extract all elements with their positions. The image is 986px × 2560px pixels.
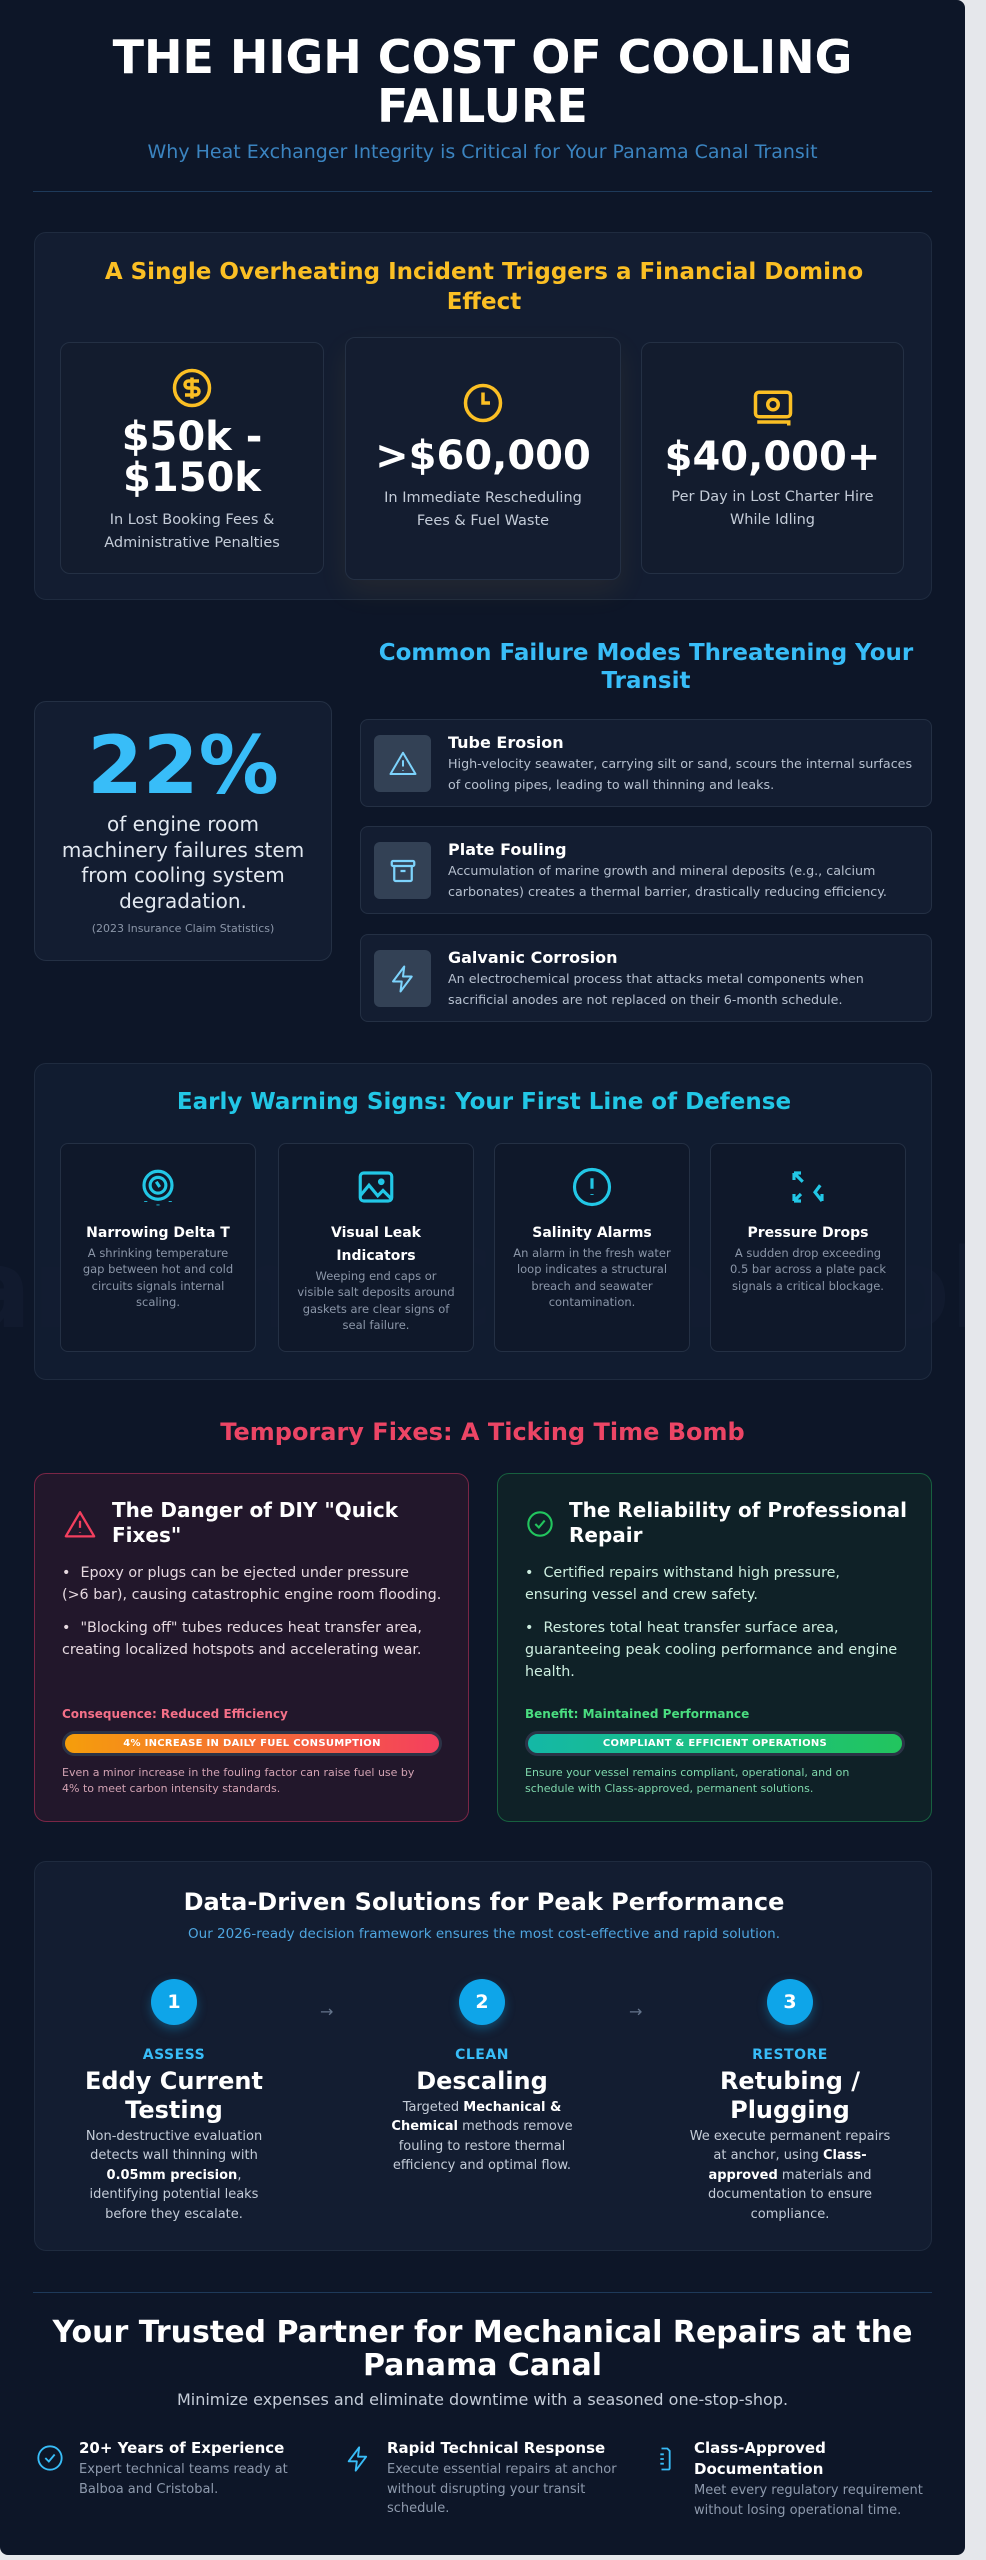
feature: class-approved: Class-Approved: [694, 2439, 826, 2457]
panel: early warning signs: [34, 1063, 932, 1380]
stat: 22%: machinery failures stem: [62, 838, 304, 862]
stat card 2: In Immediate Rescheduling: [384, 490, 582, 506]
feature: class-approved: Meet every regulatory requirement: [694, 2483, 923, 2498]
subheading: Our 2026-ready decision framework ensures the most cost-effective and rapid solution.: [188, 1926, 780, 1942]
stat card 2: [345, 337, 621, 580]
arrow 2: →: [629, 2002, 642, 2021]
heading: failure modes: [379, 640, 914, 694]
step 1: Non-destructive evaluation detects wall thinning with 0.05mm precision, identifying potential leaks before they escalate.: [86, 2129, 262, 2222]
title: [112, 30, 852, 133]
panel: DIY danger: 4% to meet carbon intensity standards.: [62, 1782, 280, 1795]
feature: experience: Balboa and Cristobal.: [79, 2482, 218, 2496]
warning card: salinity: Salinity Alarms: [532, 1225, 652, 1241]
failure mode: galvanic corrosion: sacrificial anodes are not replaced on their 6-month schedule.: [448, 992, 843, 1006]
bar: compliant: COMPLIANT & EFFICIENT OPERATIONS: [603, 1738, 827, 1749]
panel: data-driven solutions: [34, 1861, 932, 2251]
warning card: visual leak: Weeping end caps or visible salt deposits around gaskets are clear signs of seal failure.: [297, 1269, 455, 1332]
failure mode: plate fouling: Plate Fouling: [448, 840, 567, 859]
icon: warning red: [64, 1511, 96, 1538]
step 3: [690, 1978, 890, 2222]
warning card: salinity: [494, 1143, 690, 1352]
heading: solutions: Data-Driven Solutions for Peak Performance: [184, 1888, 784, 1916]
step 2: CLEAN: [455, 2047, 509, 2063]
subtitle: Why Heat Exchanger Integrity is Critical for Your Panama Canal Transit: [147, 141, 818, 163]
failure mode: plate fouling: Accumulation of marine growth and mineral deposits (e.g., calcium: [448, 863, 875, 878]
warning card: pressure: A sudden drop exceeding 0.5 bar across a plate pack signals a critical blockage.: [730, 1246, 886, 1293]
stat card 3: [641, 342, 904, 574]
step 2: 2: [475, 1991, 489, 2013]
bar: fuel consumption: 4% INCREASE IN DAILY FUEL CONSUMPTION: [123, 1738, 381, 1749]
heading: failure modes: Transit: [602, 668, 690, 694]
feature: experience: [37, 2439, 288, 2496]
stat card 3: While Idling: [730, 512, 815, 528]
panel: professional repair: [497, 1473, 932, 1822]
panel: professional repair: Restores total heat transfer surface area,: [543, 1620, 838, 1636]
failure mode: galvanic corrosion: An electrochemical process that attacks metal components when: [448, 971, 864, 986]
panel: professional repair: Ensure your vessel remains compliant, operational, and on: [525, 1766, 849, 1779]
icon: archive: [374, 842, 431, 899]
warning card: visual leak: Indicators: [336, 1248, 416, 1264]
heading: domino: [105, 259, 863, 315]
icon: lightning: [374, 950, 431, 1007]
step 3: RESTORE: [752, 2047, 828, 2063]
title: THE HIGH COST OF COOLING: [113, 30, 852, 84]
feature: class-approved: [660, 2439, 923, 2518]
feature: experience: Expert technical teams ready at: [79, 2462, 288, 2477]
feature: rapid response: Execute essential repairs at anchor: [387, 2462, 617, 2477]
stat: 22%: 22%: [87, 719, 279, 812]
stat card 1: $150k: [123, 455, 261, 501]
stat card 3: Per Day in Lost Charter Hire: [671, 489, 874, 505]
stat card 1: $50k -: [122, 414, 262, 460]
subheading: partner: Minimize expenses and eliminate downtime with a seasoned one-stop-shop.: [177, 2390, 788, 2409]
bar: fuel consumption: [62, 1731, 442, 1756]
icon: warning: [374, 735, 431, 792]
step 3: Plugging: [730, 2096, 850, 2124]
feature: rapid response: without disrupting your transit: [387, 2482, 585, 2496]
warning card: delta T: [60, 1143, 256, 1352]
bar: compliant: [525, 1731, 905, 1756]
panel: DIY danger: (>6 bar), causing catastrophic engine room flooding.: [62, 1587, 441, 1603]
heading: domino: A Single Overheating Incident Triggers a Financial Domino: [105, 259, 863, 285]
heading: trusted partner: [52, 2315, 912, 2383]
title: FAILURE: [377, 79, 588, 133]
failure mode: plate fouling: [360, 826, 932, 914]
panel: financial domino: [34, 232, 932, 600]
stat card 2: Fees & Fuel Waste: [417, 513, 549, 529]
step 3: Retubing /: [720, 2067, 860, 2095]
panel: DIY danger: [34, 1473, 469, 1822]
heading: trusted partner: Panama Canal: [363, 2348, 602, 2383]
panel: professional repair: Benefit: Maintained Performance: [525, 1707, 749, 1721]
feature: class-approved: Documentation: [694, 2460, 823, 2478]
step 3: 3: [783, 1991, 797, 2013]
stat: 22%: [34, 701, 332, 961]
stat card 1: In Lost Booking Fees &: [110, 512, 274, 528]
step 1: Eddy Current: [85, 2067, 263, 2095]
feature: rapid response: Rapid Technical Response: [387, 2439, 605, 2457]
step 1: 1: [167, 1991, 181, 2013]
failure mode: tube erosion: [360, 719, 932, 807]
warning card: pressure: Pressure Drops: [747, 1225, 869, 1241]
heading: early warning: Early Warning Signs: Your First Line of Defense: [177, 1089, 791, 1115]
warning card: salinity: An alarm in the fresh water loop indicates a structural breach and seawater contamination.: [513, 1246, 671, 1309]
stat: 22%: of engine room: [107, 812, 259, 836]
panel: DIY danger: Consequence: Reduced Efficiency: [62, 1707, 288, 1721]
stat: 22%: from cooling system: [81, 863, 285, 887]
panel: DIY danger: The Danger of DIY "Quick Fixes": [112, 1498, 398, 1547]
warning card: delta T: A shrinking temperature gap between hot and cold circuits signals internal scaling.: [83, 1246, 233, 1309]
warning card: visual leak: [278, 1143, 474, 1352]
feature: rapid response: [348, 2439, 617, 2516]
arrow 1: →: [320, 2002, 333, 2021]
step 3: at anchor, using Class-: [713, 2148, 867, 2163]
step 2: Descaling: [416, 2067, 548, 2095]
step 2: Targeted Mechanical & Chemical methods remove fouling to restore thermal efficiency and optimal flow.: [391, 2100, 573, 2173]
failure mode: galvanic corrosion: [360, 934, 932, 1022]
panel: professional repair: schedule with Class-approved, permanent solutions.: [525, 1782, 813, 1795]
failure mode: tube erosion: Tube Erosion: [448, 733, 564, 752]
feature: experience: 20+ Years of Experience: [79, 2439, 284, 2457]
heading: failure modes: Common Failure Modes Threatening Your: [379, 640, 913, 666]
step 1: ASSESS: [143, 2047, 205, 2063]
icon: check circle: [527, 1511, 553, 1537]
stat card 3: $40,000+: [665, 434, 880, 480]
failure mode: tube erosion: of cooling pipes, leading to wall thinning and leaks.: [448, 776, 774, 792]
panel: professional repair: Certified repairs withstand high pressure,: [543, 1565, 840, 1581]
stat: 22%: degradation.: [119, 888, 247, 912]
heading: temporary fixes: Temporary Fixes: A Ticking Time Bomb: [220, 1418, 745, 1446]
failure mode: galvanic corrosion: Galvanic Corrosion: [448, 948, 617, 967]
step 2: [391, 1978, 573, 2173]
feature: rapid response: schedule.: [387, 2501, 449, 2516]
warning card: visual leak: Visual Leak: [331, 1225, 421, 1241]
warning card: delta T: Narrowing Delta T: [86, 1225, 230, 1241]
stat: 22%: (2023 Insurance Claim Statistics): [92, 922, 274, 935]
panel: DIY danger: Even a minor increase in the fouling factor can raise fuel use by: [62, 1766, 414, 1779]
warning card: pressure: [710, 1143, 906, 1352]
feature: class-approved: without losing operational time.: [694, 2502, 901, 2518]
panel: professional repair: ensuring vessel and crew safety.: [525, 1587, 758, 1603]
step 3: approved materials and documentation to ensure compliance.: [708, 2168, 872, 2222]
stat card 2: >$60,000: [375, 433, 591, 479]
stat card 1: Administrative Penalties: [104, 535, 280, 551]
failure mode: plate fouling: carbonates) creates a thermal barrier, drastically reducing efficiency.: [448, 884, 887, 898]
panel: professional repair: The Reliability of Professional Repair: [569, 1498, 907, 1547]
heading: domino: Effect: [447, 289, 521, 315]
heading: trusted partner: Your Trusted Partner for Mechanical Repairs at the: [53, 2315, 912, 2350]
panel: DIY danger: Epoxy or plugs can be ejected under pressure: [80, 1565, 409, 1581]
stat card 1: [60, 342, 324, 574]
step 1: [85, 1978, 263, 2222]
panel: professional repair: guaranteeing peak cooling performance and engine health.: [525, 1642, 897, 1680]
failure mode: tube erosion: High-velocity seawater, carrying silt or sand, scours the internal surfaces: [448, 756, 912, 771]
step 3: We execute permanent repairs: [690, 2129, 890, 2144]
step 1: Testing: [125, 2096, 223, 2124]
panel: DIY danger: "Blocking off" tubes reduces heat transfer area, creating localized hotspots and accelerating wear.: [62, 1620, 422, 1658]
